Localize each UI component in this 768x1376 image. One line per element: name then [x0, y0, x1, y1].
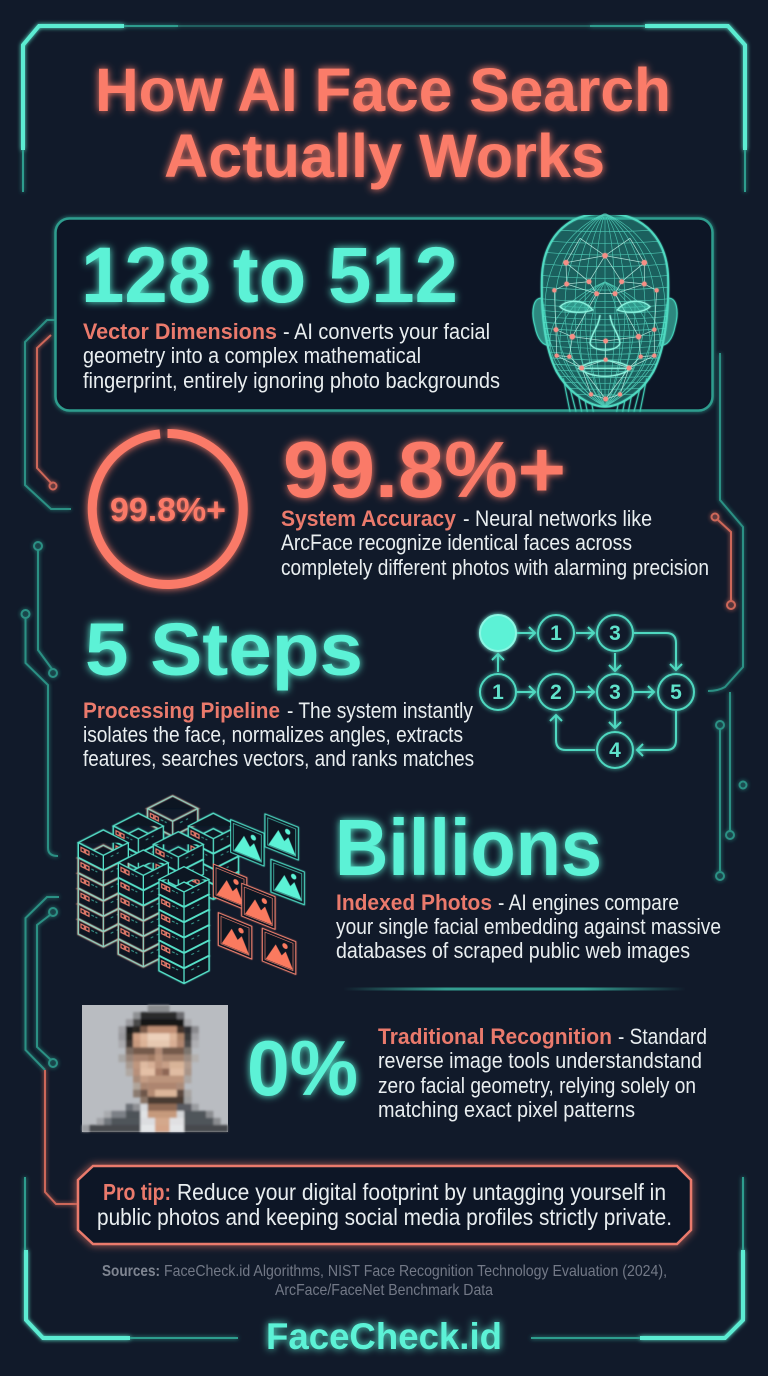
- stat: 99.8%+: 99.8%+: [283, 425, 566, 514]
- photo tiles teal: [231, 814, 304, 905]
- text: traditional recognition description: zero facial geometry, relying solely on: [378, 1073, 696, 1098]
- text: traditional recognition description: matching exact pixel patterns: [378, 1097, 635, 1122]
- panel: indexed photos: [78, 796, 721, 983]
- illustration: server stacks and photos: [78, 796, 304, 983]
- server stack front: [159, 867, 209, 983]
- text: indexed photos description: [336, 890, 721, 963]
- sources: FaceCheck.id Algorithms, NIST Face Recognition Technology Evaluation (2024),: [164, 1263, 667, 1280]
- text: system accuracy description: [281, 506, 709, 580]
- callout: pro tip: Pro tip:: [103, 1179, 171, 1205]
- text: pipeline description: Processing Pipeline: [83, 698, 280, 723]
- icon: wireframe face: [533, 213, 677, 412]
- flowchart: pipeline nodes: [480, 615, 694, 768]
- sources: [102, 1263, 667, 1299]
- callout: pro tip: [78, 1166, 691, 1244]
- text: indexed photos description: Indexed Photos: [336, 890, 492, 915]
- text: traditional recognition description: reverse image tools understandstand: [378, 1048, 702, 1073]
- frame: top bracket: [23, 26, 745, 192]
- text: pipeline description: - The system instantly: [287, 698, 473, 723]
- title: How AI Face Search: [95, 56, 671, 124]
- flowchart: pipeline nodes: 5: [670, 681, 682, 704]
- text: vector dimensions description: - AI converts your facial: [283, 319, 490, 344]
- circuit traces: left side: [22, 320, 78, 1204]
- callout: pro tip: public photos and keeping social media profiles strictly private.: [97, 1204, 672, 1230]
- title: [95, 56, 671, 190]
- text: vector dimensions description: [83, 319, 500, 393]
- flowchart: pipeline nodes: 1: [492, 681, 504, 704]
- chart: accuracy ring: [92, 433, 243, 584]
- text: system accuracy description: completely different photos with alarming precision: [281, 555, 709, 580]
- flowchart: pipeline nodes: 2: [550, 681, 562, 704]
- title: Actually Works: [164, 122, 605, 190]
- text: indexed photos description: databases of scraped public web images: [336, 938, 690, 963]
- callout: pro tip: Reduce your digital footprint by untagging yourself in: [177, 1179, 666, 1205]
- image: pixelated portrait: [82, 1005, 228, 1132]
- flowchart: pipeline nodes: 4: [609, 739, 621, 762]
- text: traditional recognition description: - Standard: [618, 1024, 707, 1049]
- text: pipeline description: features, searches vectors, and ranks matches: [83, 746, 474, 771]
- text: pipeline description: isolates the face, normalizes angles, extracts: [83, 722, 463, 747]
- server stack left: [78, 830, 128, 947]
- text: vector dimensions description: fingerprint, entirely ignoring photo backgrounds: [83, 368, 500, 393]
- text: indexed photos description: your single facial embedding against massive: [336, 914, 721, 939]
- stat: Billions: Billions: [335, 803, 602, 892]
- sources: ArcFace/FaceNet Benchmark Data: [275, 1282, 493, 1299]
- server stack back row: [113, 796, 238, 899]
- stat: 0%: 0%: [247, 1024, 358, 1112]
- panel: vector dimensions: [56, 213, 712, 412]
- text: traditional recognition description: Traditional Recognition: [378, 1024, 612, 1049]
- server stack middle: [118, 850, 168, 967]
- stat: 128 to 512: 128 to 512: [81, 230, 458, 319]
- panel: processing pipeline: [83, 608, 694, 771]
- panel: traditional recognition: [82, 1005, 707, 1132]
- sources: Sources:: [102, 1263, 160, 1280]
- text: indexed photos description: - AI engines compare: [498, 890, 679, 915]
- text: vector dimensions description: Vector Dimensions: [83, 319, 277, 344]
- text: vector dimensions description: geometry into a complex mathematical: [83, 343, 421, 368]
- circuit traces: right side: [708, 353, 746, 880]
- flowchart: pipeline nodes: 3: [609, 681, 621, 704]
- flowchart: pipeline nodes: 3: [609, 622, 621, 645]
- text: system accuracy description: ArcFace recognize identical faces across: [281, 530, 632, 555]
- photo tiles coral: [213, 864, 296, 974]
- flowchart: pipeline nodes: 1: [550, 622, 562, 645]
- frame: bottom bracket: [25, 1177, 743, 1338]
- stat: 5 Steps: 5 Steps: [85, 608, 363, 691]
- panel: system accuracy: [92, 425, 709, 584]
- text: pipeline description: [83, 698, 474, 771]
- chart: accuracy ring: 99.8%+: [110, 491, 226, 528]
- text: system accuracy description: - Neural networks like: [463, 506, 652, 531]
- text: system accuracy description: System Accuracy: [281, 506, 457, 531]
- brand: FaceCheck.id: FaceCheck.id: [266, 1316, 502, 1357]
- text: traditional recognition description: [378, 1024, 707, 1122]
